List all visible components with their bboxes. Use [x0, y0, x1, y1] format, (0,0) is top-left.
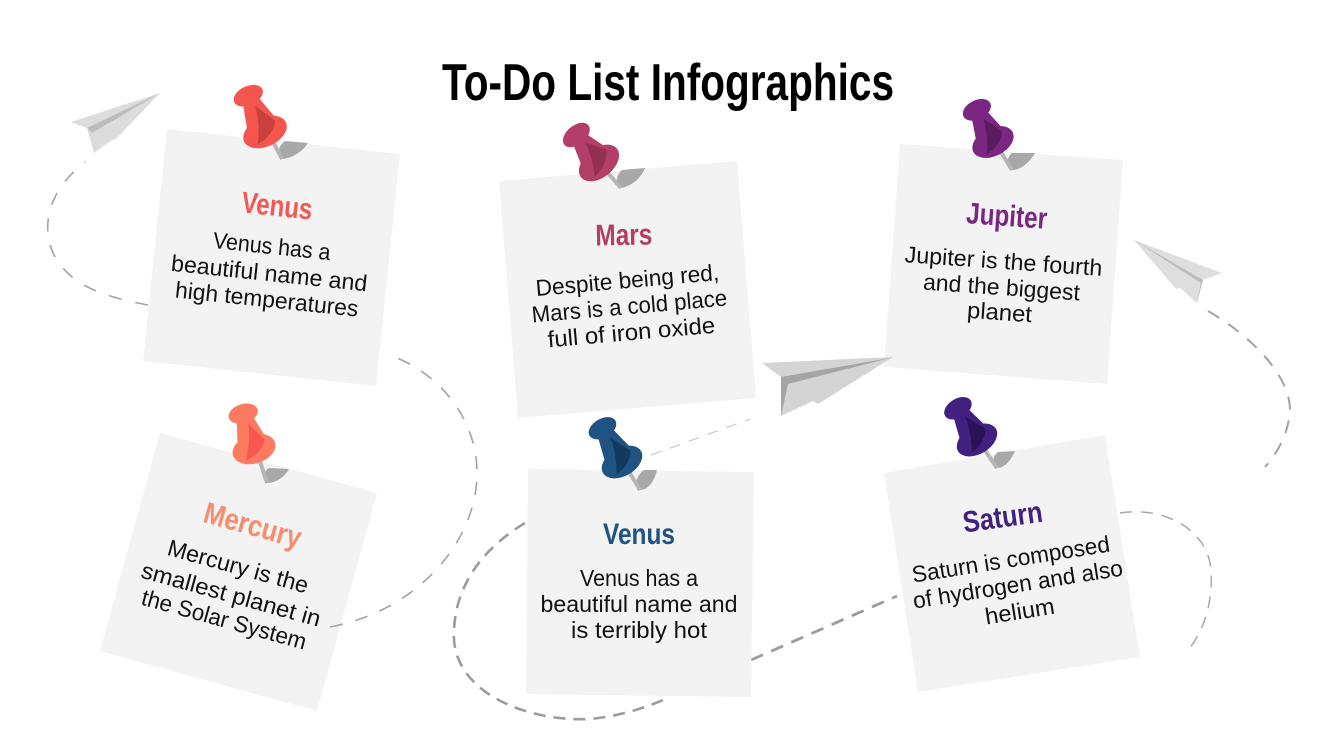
panel: Venus blue note: [526, 469, 754, 697]
text block: Jupiter description: Jupiter is the fourth: [904, 241, 1103, 281]
panel: Venus red note: [143, 129, 400, 386]
heading: Jupiter: Jupiter: [965, 197, 1048, 236]
text block: Mercury description: Mercury is the: [165, 534, 311, 598]
text block: Mars description: full of iron oxide: [546, 312, 716, 352]
icon: paper plane left: [71, 93, 160, 153]
icon: violet push pin: [934, 389, 1015, 468]
text block: Venus description: [170, 227, 369, 322]
text block: Mars description: Mars is a cold place: [531, 285, 728, 328]
text block: Venus description: Venus has a: [580, 565, 698, 591]
text block: Mercury description: [139, 534, 324, 655]
dashed path: Venus to Mercury: [330, 354, 477, 627]
icon: paper plane right: [1134, 240, 1222, 303]
text block: Venus description: beautiful name and: [170, 250, 369, 296]
text block: Mercury description: the Solar System: [139, 584, 310, 655]
text block: Venus description: Venus has a: [212, 227, 332, 265]
dashed path: Saturn right loop: [1120, 512, 1211, 650]
icon: paper plane centre: [762, 357, 893, 416]
text block: Saturn description: of hydrogen and also: [911, 555, 1124, 614]
panel: Mars note: [499, 161, 756, 418]
text block: Jupiter description: and the biggest: [922, 269, 1081, 306]
dashed path: blue pin to centre plane: [651, 419, 750, 455]
text block: Venus description: is terribly hot: [571, 617, 708, 643]
text block: Mercury description: smallest planet in: [139, 557, 324, 632]
dashed path: right side to plane: [1208, 311, 1290, 467]
text block: Mars description: [531, 259, 728, 352]
text block: Venus description: beautiful name and: [540, 591, 738, 617]
text block: Jupiter description: planet: [966, 297, 1034, 327]
heading: Venus: Venus: [240, 186, 314, 227]
icon: blue push pin: [579, 409, 657, 490]
dashed path: Venus to Saturn: [751, 596, 897, 660]
text block: Saturn description: helium: [983, 593, 1056, 629]
panel: Saturn note: [884, 435, 1140, 692]
dashed path: top-left loop: [48, 162, 148, 305]
text block: Mars description: Despite being red,: [535, 259, 720, 301]
title: To-Do List Infographics: [442, 54, 894, 112]
icon: red push pin: [223, 77, 308, 159]
dashed path: bottom loop: [454, 523, 668, 719]
icon: purple push pin: [953, 91, 1035, 170]
panel: Jupiter note: [884, 144, 1123, 384]
text block: Venus description: [540, 565, 738, 643]
icon: coral push pin: [219, 398, 289, 483]
icon: magenta push pin: [552, 113, 645, 189]
text block: Saturn description: [910, 531, 1124, 629]
heading: Mars: Mars: [595, 219, 653, 252]
text block: Venus description: high temperatures: [174, 276, 360, 322]
text block: Saturn description: Saturn is composed: [910, 531, 1112, 588]
heading: Saturn: Saturn: [961, 496, 1045, 539]
text block: Jupiter description: [904, 241, 1103, 327]
heading: Mercury: Mercury: [200, 497, 305, 555]
heading: Venus: Venus: [603, 518, 675, 551]
panel: Mercury note: [100, 433, 377, 711]
